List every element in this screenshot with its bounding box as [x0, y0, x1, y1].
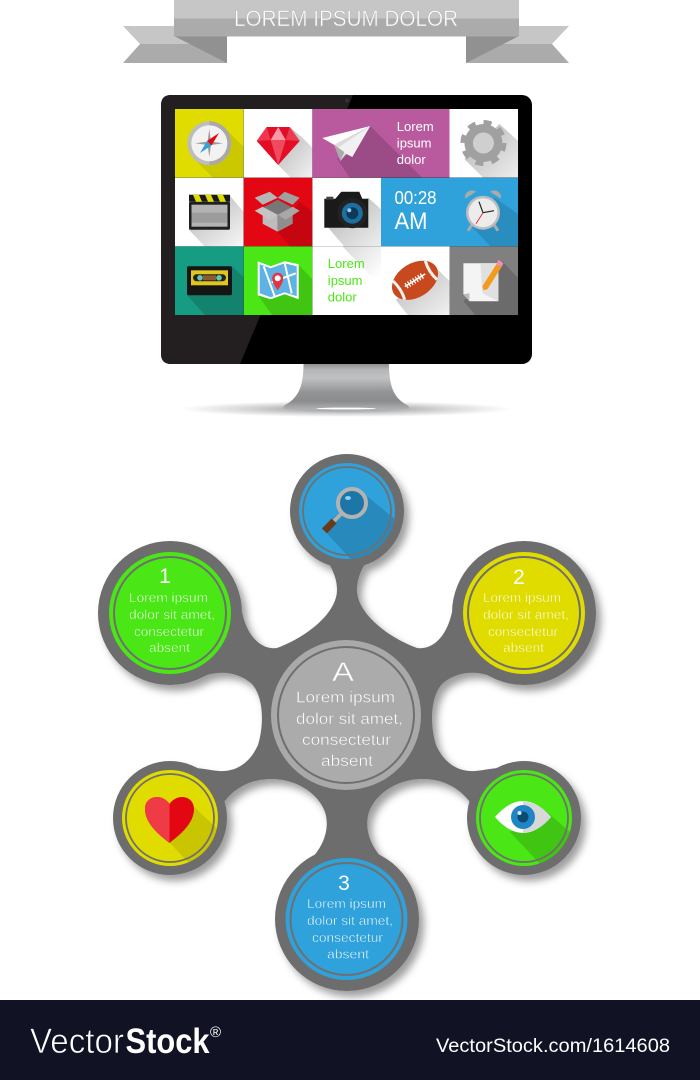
footer bar: [0, 1000, 700, 1080]
node: heart: [122, 770, 218, 866]
tile: green text: ipsum: [328, 273, 362, 288]
node 2: yellow: absent: [503, 640, 544, 655]
tile: note and pencil: [450, 246, 518, 315]
footer logo: Stock: [126, 1022, 210, 1061]
node 1: green: Lorem ipsum: [129, 590, 208, 605]
icon: heart: [145, 797, 194, 843]
right ribbon tail: [466, 26, 569, 63]
monitor floor shadow: [180, 401, 512, 417]
registered mark: ®: [210, 1024, 221, 1041]
node 1: green: consectetur: [134, 624, 205, 639]
centre node A: [271, 640, 421, 790]
node 3: blue: [286, 858, 408, 980]
node 3: blue: 3: [338, 872, 350, 895]
tile: ruby: [244, 109, 312, 178]
tile: clapperboard: [175, 178, 244, 246]
icon: eye: [495, 801, 551, 833]
tile: green text: [312, 246, 381, 315]
screen tiles: [175, 109, 518, 315]
centre node A: dolor sit amet,: [296, 711, 403, 728]
node 2: yellow: Lorem ipsum: [483, 590, 561, 605]
tile: paper plane with text: ipsum: [397, 136, 431, 150]
ribbon centre band: [174, 0, 519, 36]
centre node A: A: [332, 657, 354, 687]
node 1: green: 1: [159, 565, 171, 588]
monitor stand: [283, 364, 409, 410]
footer logo: [30, 1022, 210, 1061]
node 1: green: [109, 552, 231, 674]
centre node A: Lorem ipsum: [296, 690, 395, 706]
ribbon banner: [123, 0, 569, 63]
node 1: green: dolor sit amet,: [129, 607, 215, 622]
tile: gear: [450, 109, 518, 178]
icon: heart long shadow: [170, 806, 216, 862]
centre node A: consectetur: [302, 732, 392, 749]
node 3: blue: consectetur: [312, 930, 384, 945]
tile: american football: [381, 246, 450, 315]
monitor bezel: [161, 95, 532, 364]
node 3: blue: absent: [327, 946, 369, 962]
tile: cardboard box: [244, 178, 312, 246]
tile: camera: [312, 178, 381, 246]
metaball diagram: [98, 454, 596, 991]
icon: eye long shadow: [510, 810, 570, 864]
tile: paper plane with text: [312, 109, 450, 178]
top node: magnifier: [299, 463, 395, 559]
tile: cassette: [175, 246, 244, 315]
node: eye: [476, 770, 572, 866]
title: LOREM IPSUM DOLOR: [234, 6, 458, 31]
icon: magnifier long shadow: [322, 496, 394, 559]
grey connected blob: [98, 454, 596, 991]
footer logo: Vector: [30, 1022, 124, 1061]
tile: green text: dolor: [328, 289, 357, 304]
tile: alarm clock with time: AM: [394, 208, 428, 235]
node 3: blue: dolor sit amet,: [307, 913, 393, 928]
node 1: green: absent: [149, 640, 190, 655]
node 2: yellow: 2: [513, 566, 525, 589]
footer url: VectorStock.com/1614608: [436, 1035, 670, 1057]
tile: map: [244, 246, 312, 315]
left ribbon tail: [123, 26, 227, 63]
tile: paper plane with text: dolor: [397, 152, 426, 167]
node 2: yellow: consectetur: [488, 624, 559, 639]
icon: magnifier: [324, 489, 366, 531]
tile: paper plane with text: Lorem: [397, 119, 434, 134]
node 3: blue: Lorem ipsum: [307, 896, 386, 911]
node 2: yellow: [463, 552, 585, 674]
monitor: [161, 95, 551, 417]
node 2: yellow: dolor sit amet,: [483, 607, 569, 622]
tile: alarm clock with time: 00:28: [394, 188, 436, 208]
centre node A: absent: [321, 753, 374, 770]
tile: alarm clock with time: [381, 178, 518, 246]
tile: green text: Lorem: [328, 256, 365, 271]
tile: compass: [175, 109, 244, 178]
